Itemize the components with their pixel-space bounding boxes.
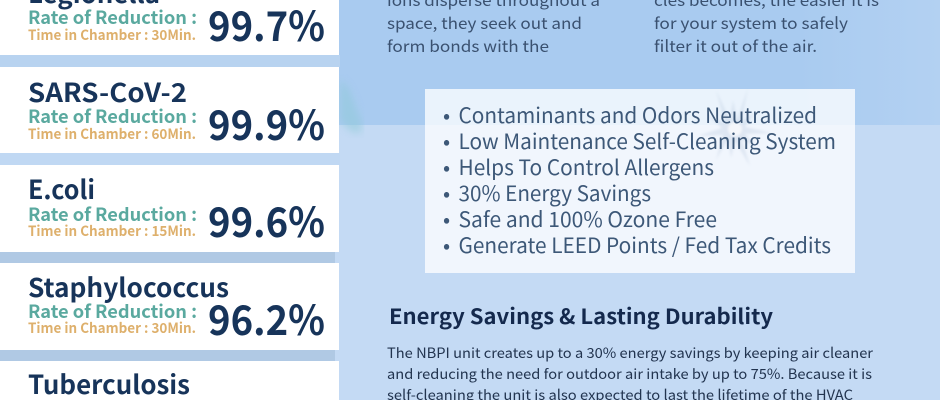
icon: pale starburst bbox=[698, 88, 772, 166]
background: lower light band bbox=[0, 125, 940, 400]
text block: right column intro: filter it out of the air. bbox=[654, 33, 817, 57]
panel: E.coli card bbox=[0, 165, 339, 252]
icon: teal blurred blob bbox=[340, 80, 362, 133]
list item: contaminants: • bbox=[443, 100, 450, 130]
panel: Staphylococcus card: 96.2% bbox=[208, 287, 325, 347]
panel: benefits list: 30% Energy Savings bbox=[458, 178, 651, 208]
list item: maintenance: • bbox=[443, 126, 450, 156]
panel: Staphylococcus card: Staphylococcus bbox=[28, 268, 229, 305]
panel: benefits list: Helps To Control Allergens bbox=[458, 152, 714, 182]
panel: Legionella card: Rate of Reduction : bbox=[28, 4, 197, 30]
panel: SARS-CoV-2 card: 99.9% bbox=[208, 92, 325, 152]
panel: Staphylococcus card bbox=[0, 263, 339, 350]
panel: benefits list: Safe and 100% Ozone Free bbox=[458, 204, 717, 234]
text block: left column intro: space, they seek out and bbox=[387, 10, 582, 34]
text block: energy savings body: and reducing the need for outdoor air intake by up to 75%. Because it is bbox=[387, 364, 872, 384]
gap strips between cards bbox=[0, 55, 340, 361]
list item: LEED points: • bbox=[443, 230, 450, 260]
panel: SARS-CoV-2 card: SARS-CoV-2 bbox=[28, 73, 187, 110]
panel: SARS-CoV-2 card: Time in Chamber : 60Min. bbox=[28, 124, 196, 144]
text block: right column intro bbox=[654, 0, 879, 57]
heading: energy savings: Energy Savings & Lasting Durability bbox=[389, 301, 773, 331]
panel: SARS-CoV-2 card: Rate of Reduction : bbox=[28, 103, 197, 129]
list item: allergens: • bbox=[443, 152, 450, 182]
text block: left column intro: form bonds with the bbox=[387, 33, 549, 57]
panel: Tuberculosis card bbox=[0, 361, 339, 400]
text block: energy savings body bbox=[387, 343, 874, 400]
panel: benefits list: Contaminants and Odors Neutralized bbox=[458, 100, 817, 130]
panel: benefits list: Generate LEED Points / Fed Tax Credits bbox=[458, 230, 831, 260]
text block: left column intro bbox=[387, 0, 600, 57]
list item: energy savings: • bbox=[443, 178, 450, 208]
panel: E.coli card: Rate of Reduction : bbox=[28, 201, 197, 227]
background: upper blue band bbox=[0, 0, 940, 125]
list item: ozone free: • bbox=[443, 204, 450, 234]
panel: Legionella card bbox=[0, 0, 339, 55]
panel: benefits list: Low Maintenance Self-Cleaning System bbox=[458, 126, 836, 156]
panel: Staphylococcus card: Time in Chamber : 30Min. bbox=[28, 318, 196, 338]
panel: Legionella card: Time in Chamber : 30Min. bbox=[28, 25, 196, 45]
panel: SARS-CoV-2 card bbox=[0, 67, 339, 153]
panel: Staphylococcus card: Rate of Reduction : bbox=[28, 298, 197, 324]
text block: energy savings body: The NBPI unit creates up to a 30% energy savings by keeping air cleaner bbox=[387, 343, 874, 363]
panel: E.coli card: Time in Chamber : 15Min. bbox=[28, 221, 196, 241]
text block: right column intro: for your system to safely bbox=[654, 10, 849, 34]
panel: E.coli card: E.coli bbox=[28, 170, 95, 207]
panel: benefits list bbox=[425, 88, 855, 273]
panel: E.coli card: 99.6% bbox=[208, 189, 325, 249]
